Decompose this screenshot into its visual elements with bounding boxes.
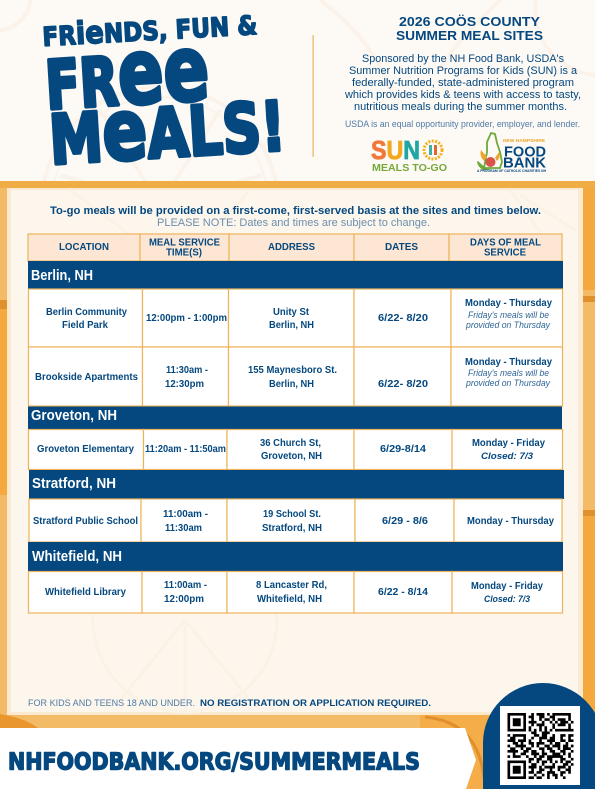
row: Berlin Community Field Park: Field Park — [62, 320, 109, 331]
table header row: SERVICE — [484, 248, 526, 258]
row: Berlin Community Field Park: Berlin Community — [46, 307, 128, 318]
logo: New Hampshire Food Bank: BANK — [503, 156, 547, 172]
row: Whitefield Library: 12:00pm — [164, 594, 204, 605]
row: Stratford Public School: 19 School St. — [263, 509, 321, 520]
row: Brookside Apartments — [28, 347, 562, 406]
table header row — [28, 234, 562, 261]
text block: program description: federally-funded, state-administered program — [352, 77, 574, 89]
row: Brookside Apartments: Monday - Thursday — [465, 357, 553, 368]
text block: eligibility note: NO REGISTRATION OR APPLICATION REQUIRED. — [200, 698, 431, 709]
title: Friends, Fun & Free Meals!: FRee — [42, 16, 212, 131]
row: Brookside Apartments: 6/22- 8/20 — [378, 379, 429, 390]
row: Stratford Public School: 6/29 - 8/6 — [382, 516, 429, 527]
title: Friends, Fun & Free Meals!: FRieNDS, FUN & — [41, 6, 258, 54]
row: Brookside Apartments: provided on Thursday — [465, 378, 550, 388]
text block: equal opportunity statement: USDA is an equal opportunity provider, employer, and lender. — [345, 119, 580, 129]
row: Whitefield Library: Whitefield, NH — [257, 594, 322, 605]
row: Groveton Elementary: Monday - Friday — [472, 438, 546, 449]
table header row: DATES — [385, 242, 418, 253]
table header row: TIME(S) — [166, 248, 202, 258]
title: Friends, Fun & Free Meals!: MeALS! — [46, 72, 288, 184]
row: Brookside Apartments: Brookside Apartments — [35, 372, 139, 383]
heading: county summer meal sites: SUMMER MEAL SITES — [396, 28, 543, 43]
panel: site listing background — [7, 188, 583, 715]
section: Berlin, NH — [28, 261, 563, 289]
table header row: LOCATION — [59, 242, 109, 253]
orange border band — [0, 181, 595, 789]
logo: New Hampshire Food Bank: A PROGRAM OF CATHOLIC CHARITIES NH — [477, 169, 547, 173]
row: Groveton Elementary — [28, 430, 562, 470]
section: Berlin, NH: Berlin, NH — [31, 268, 93, 284]
row: Brookside Apartments: 155 Maynesboro St. — [248, 365, 337, 376]
row: Brookside Apartments: Berlin, NH — [269, 379, 314, 390]
section: Whitefield, NH: Whitefield, NH — [32, 549, 122, 565]
text block: program description: which provides kids & teens with access to tasty, — [344, 89, 581, 101]
table header row: ADDRESS — [268, 242, 315, 253]
row: Stratford Public School: Stratford, NH — [262, 523, 322, 534]
row: Whitefield Library: Whitefield Library — [45, 587, 127, 598]
title: Friends, Fun & Free Meals! — [41, 6, 288, 184]
row: Stratford Public School: 11:30am — [165, 523, 202, 534]
row: Groveton Elementary: 36 Church St, — [260, 438, 321, 449]
logo: SUN Meals To-Go — [371, 135, 447, 174]
row: Brookside Apartments: 12:30pm — [165, 379, 204, 390]
banner: website URL — [0, 728, 476, 789]
text block: eligibility note: FOR KIDS AND TEENS 18 AND UNDER. — [28, 698, 195, 709]
section: Stratford, NH: Stratford, NH — [32, 476, 116, 492]
table header row: DAYS OF MEAL — [470, 238, 541, 248]
text block: program description — [344, 53, 581, 113]
row: Groveton Elementary: 6/29-8/14 — [380, 444, 427, 455]
row: Berlin Community Field Park: Unity St — [273, 307, 310, 318]
divider line — [312, 35, 314, 157]
section: Stratford, NH — [29, 470, 564, 499]
row: Whitefield Library: Closed: 7/3 — [484, 594, 530, 604]
heading: county summer meal sites — [396, 14, 543, 43]
row: Berlin Community Field Park — [28, 289, 562, 347]
logo: New Hampshire Food Bank — [477, 133, 547, 173]
heading: county summer meal sites: 2026 COÖS COUNTY — [399, 14, 540, 29]
row: Groveton Elementary: Closed: 7/3 — [481, 450, 534, 461]
row: Whitefield Library: Monday - Friday — [471, 581, 544, 592]
row: Stratford Public School — [29, 499, 562, 542]
text block: to-go meal notice: To-go meals will be provided on a first-come, first-served basis at the sites and times below. — [50, 205, 541, 217]
row: Stratford Public School: Monday - Thursday — [467, 516, 555, 527]
text block: program description: Sponsored by the NH Food Bank, USDA's — [362, 53, 564, 65]
logo: SUN Meals To-Go: SUN — [371, 135, 420, 165]
QR code panel — [483, 683, 595, 789]
text block: eligibility note — [28, 698, 431, 709]
row: Berlin Community Field Park: 12:00pm - 1:00pm — [146, 313, 227, 324]
logo: New Hampshire Food Bank: NEW HAMPSHIRE — [503, 138, 545, 143]
text block: program description: Summer Nutrition Programs for Kids (SUN) is a — [349, 65, 578, 77]
row: Whitefield Library: 6/22 - 8/14 — [378, 587, 429, 598]
row: Berlin Community Field Park: Monday - Thursday — [465, 298, 553, 309]
QR code — [508, 714, 574, 778]
table: summer meal sites — [28, 234, 564, 613]
row: Brookside Apartments: 11:30am - — [166, 365, 208, 376]
section: Whitefield, NH — [28, 542, 563, 571]
row: Groveton Elementary: Groveton, NH — [261, 451, 322, 462]
banner: website URL: NHFOODBANK.ORG/SUMMERMEALS — [8, 748, 420, 776]
row: Stratford Public School: 11:00am - — [163, 509, 208, 520]
text block: to-go meal notice: PLEASE NOTE: Dates and times are subject to change. — [157, 217, 430, 229]
table header row: MEAL SERVICE — [149, 238, 220, 248]
row: Berlin Community Field Park: 6/22- 8/20 — [378, 313, 429, 324]
row: Berlin Community Field Park: provided on Thursday — [465, 320, 550, 330]
row: Groveton Elementary: Groveton Elementary — [37, 444, 135, 455]
row: Whitefield Library: 8 Lancaster Rd, — [256, 580, 327, 591]
row: Stratford Public School: Stratford Public School — [33, 516, 138, 527]
text block: program description: nutritious meals during the summer months. — [354, 101, 567, 113]
row: Berlin Community Field Park: Friday's meals will be — [468, 310, 549, 320]
row: Groveton Elementary: 11:20am - 11:50am — [145, 444, 226, 455]
row: Whitefield Library — [28, 572, 562, 613]
text block: to-go meal notice — [50, 205, 541, 229]
row: Berlin Community Field Park: Berlin, NH — [269, 320, 314, 331]
logo: SUN Meals To-Go: MEALS TO-GO — [372, 163, 447, 174]
section: Groveton, NH — [28, 406, 562, 429]
row: Brookside Apartments: Friday's meals will be — [468, 368, 549, 378]
row: Whitefield Library: 11:00am - — [164, 580, 207, 591]
logo: New Hampshire Food Bank: FOOD — [504, 144, 546, 160]
section: Groveton, NH: Groveton, NH — [31, 408, 117, 424]
